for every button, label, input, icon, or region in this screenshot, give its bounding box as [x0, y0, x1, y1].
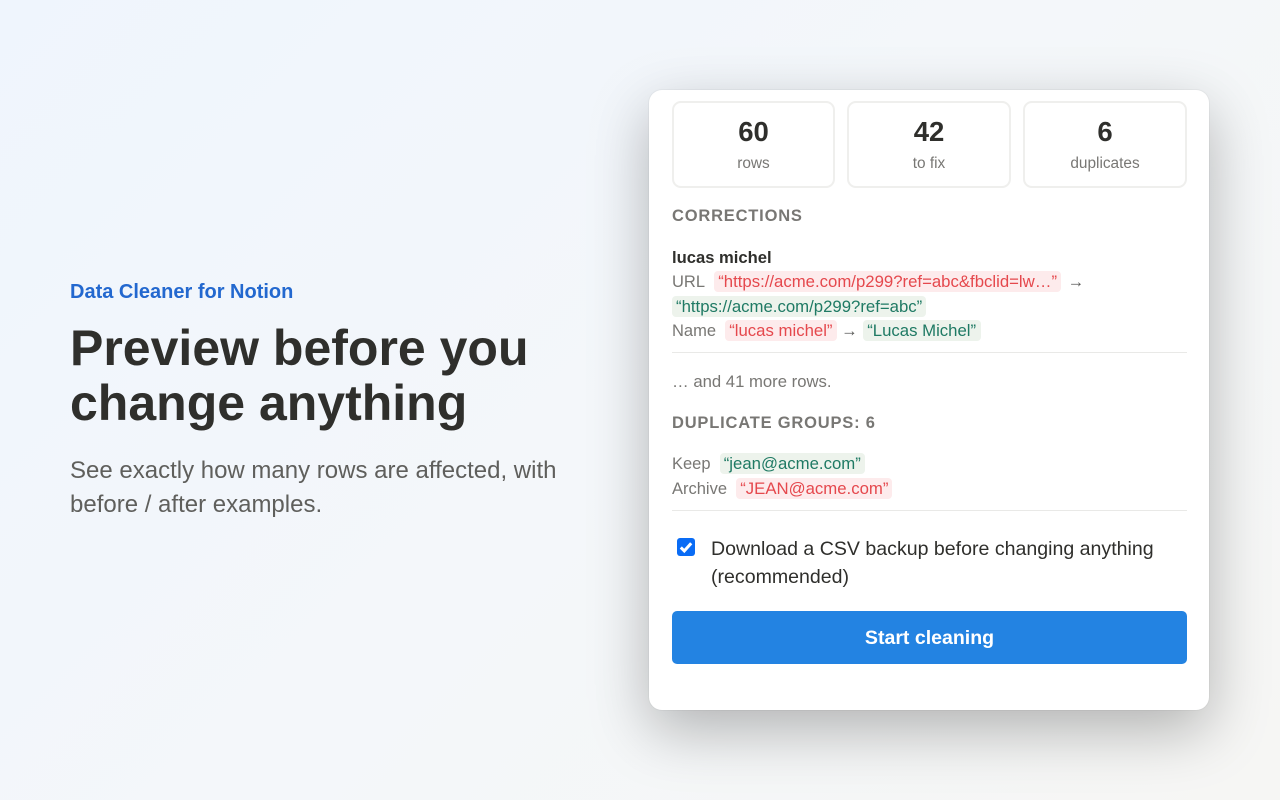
- button: start cleaning: Start cleaning: [865, 627, 994, 649]
- stat: rows: rows: [737, 155, 770, 172]
- subtitle: See exactly how many rows are affected, with: [70, 457, 556, 484]
- heading: corrections: CORRECTIONS: [672, 207, 803, 225]
- correction example: lucas michel: Name “lucas michel” → “Lucas Michel”: [672, 321, 976, 340]
- button: start cleaning: [672, 611, 1187, 664]
- title: change anything: [70, 375, 467, 431]
- correction example: lucas michel: “https://acme.com/p299?ref=abc”: [676, 297, 922, 316]
- correction example: lucas michel: lucas michel: [672, 248, 772, 267]
- note: more rows: … and 41 more rows.: [672, 372, 832, 390]
- duplicate example: [672, 453, 892, 499]
- title: [70, 320, 528, 431]
- checkbox label: Download a CSV backup before changing anything: [711, 538, 1154, 560]
- stat: to fix: 42: [914, 116, 944, 147]
- stat: duplicates: duplicates: [1070, 155, 1140, 172]
- stat: to fix: to fix: [913, 155, 945, 172]
- correction example: lucas michel: URL “https://acme.com/p299?ref=abc&fbclid=lw…” →: [672, 272, 1084, 291]
- duplicate example: Keep “jean@acme.com”: [672, 454, 861, 473]
- stat: rows: 60: [738, 116, 769, 147]
- correction example: lucas michel: [672, 248, 1084, 341]
- heading: duplicate groups: DUPLICATE GROUPS: 6: [672, 414, 876, 432]
- stat: rows: [672, 101, 835, 188]
- stat: duplicates: 6: [1097, 116, 1113, 147]
- checkbox label: (recommended): [711, 566, 849, 588]
- eyebrow: product name: Data Cleaner for Notion: [70, 281, 293, 303]
- subtitle: before / after examples.: [70, 491, 322, 518]
- subtitle: [70, 457, 556, 518]
- checkbox label: [711, 538, 1154, 588]
- checkbox: CSV backup: [677, 538, 695, 556]
- panel: preview card: [649, 90, 1209, 710]
- stat: duplicates: [1023, 101, 1187, 188]
- duplicate example: Archive “JEAN@acme.com”: [672, 479, 888, 498]
- stat: to fix: [847, 101, 1011, 188]
- title: Preview before you: [70, 320, 528, 376]
